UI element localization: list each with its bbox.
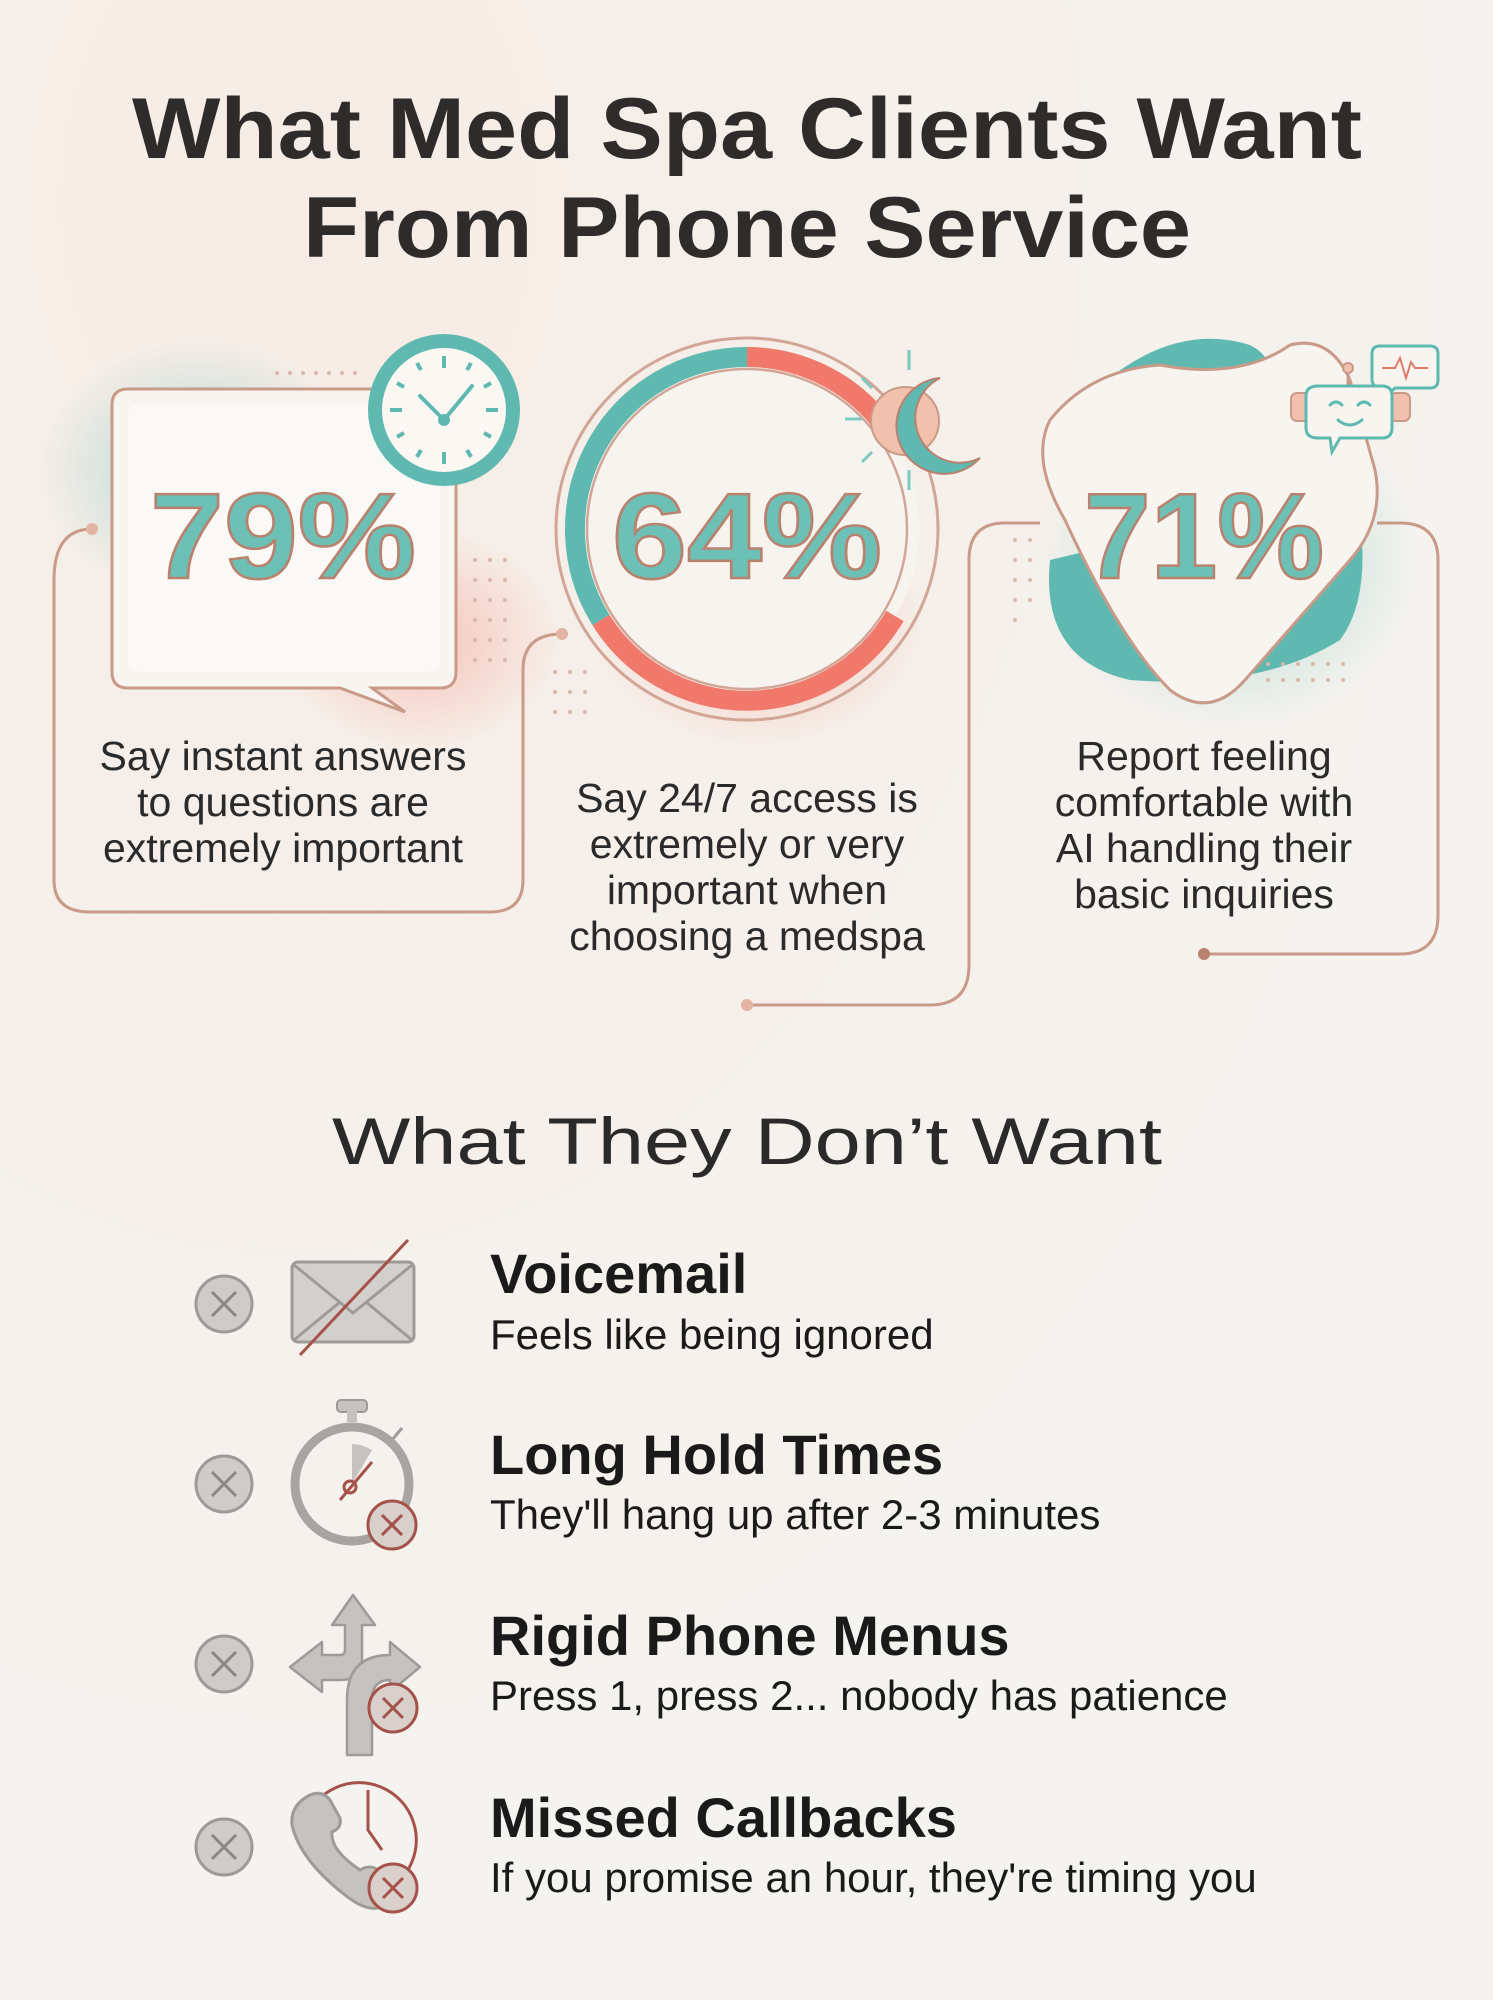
title: What Med Spa Clients Want xyxy=(132,81,1362,177)
caption 3: comfortable with xyxy=(1055,779,1353,825)
caption 3: Report feeling xyxy=(1076,733,1332,779)
caption 1: to questions are xyxy=(137,779,429,825)
icon: crossed envelope xyxy=(292,1240,414,1355)
caption 2 xyxy=(569,775,925,959)
rounded triangle shape xyxy=(1043,343,1377,703)
text xyxy=(490,1786,1257,1901)
icon: sun and moon xyxy=(845,350,980,490)
dots xyxy=(1013,538,1345,682)
title xyxy=(132,81,1362,276)
connector line 3 xyxy=(1204,523,1438,954)
text: Long Hold Times xyxy=(490,1423,943,1486)
caption 1: Say instant answers xyxy=(100,733,466,779)
dots xyxy=(275,371,357,375)
panel: 71% AI comfort xyxy=(1013,339,1438,960)
icon: robot chat xyxy=(1291,346,1438,452)
caption 1 xyxy=(100,733,466,871)
caption 1: extremely important xyxy=(103,825,464,871)
stat 64%: 64% xyxy=(612,468,882,604)
dots xyxy=(553,670,587,714)
icon: x circle xyxy=(196,1636,252,1692)
text xyxy=(490,1242,934,1358)
icon: x circle xyxy=(196,1276,252,1332)
icon: x circle xyxy=(196,1819,252,1875)
speech box xyxy=(112,389,456,712)
text: Press 1, press 2... nobody has patience xyxy=(490,1672,1228,1719)
heading: what they don't want: What They Don’t Want xyxy=(332,1104,1162,1178)
icon: stopwatch xyxy=(295,1400,416,1549)
connector line 1 xyxy=(54,529,562,912)
icon: phone with clock xyxy=(292,1783,417,1912)
stat 79%: 79% xyxy=(150,468,416,604)
icon: x circle xyxy=(196,1456,252,1512)
list item: rigid phone menus xyxy=(196,1595,1228,1755)
teal blob xyxy=(1049,339,1362,682)
text: If you promise an hour, they're timing you xyxy=(490,1854,1257,1901)
title: From Phone Service xyxy=(303,180,1191,276)
text: They'll hang up after 2-3 minutes xyxy=(490,1491,1100,1538)
text: Feels like being ignored xyxy=(490,1311,934,1358)
caption 2: extremely or very xyxy=(590,821,905,867)
ring xyxy=(556,338,938,720)
panel: 64% 24/7 access xyxy=(553,338,1040,1011)
icon: clock xyxy=(368,334,520,486)
icon: branching arrows xyxy=(290,1595,420,1755)
caption 2: important when xyxy=(607,867,887,913)
list item: missed callbacks xyxy=(196,1783,1257,1912)
caption 2: choosing a medspa xyxy=(569,913,925,959)
text xyxy=(490,1423,1100,1538)
stat 71%: 71% xyxy=(1084,468,1324,604)
text xyxy=(490,1604,1228,1719)
text: Voicemail xyxy=(490,1242,747,1305)
caption 3 xyxy=(1055,733,1353,917)
text: Rigid Phone Menus xyxy=(490,1604,1010,1667)
connector line 2 xyxy=(747,523,1040,1005)
text: Missed Callbacks xyxy=(490,1786,957,1849)
list item: voicemail xyxy=(196,1240,934,1358)
caption 3: basic inquiries xyxy=(1074,871,1334,917)
list item: long hold times xyxy=(196,1400,1100,1549)
panel: 79% instant answers xyxy=(40,334,568,912)
caption 3: AI handling their xyxy=(1056,825,1352,871)
caption 2: Say 24/7 access is xyxy=(576,775,918,821)
